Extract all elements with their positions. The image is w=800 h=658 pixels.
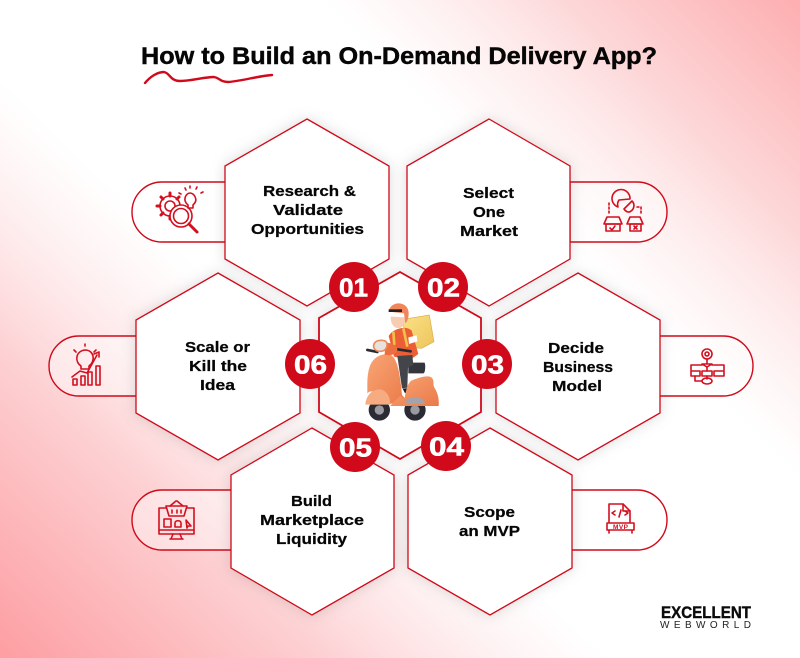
pill <box>570 182 667 242</box>
panel: scale icon pill <box>49 336 137 396</box>
pill <box>571 490 667 550</box>
panel: step 2 <box>407 119 570 306</box>
step number 05: 05 <box>339 432 372 462</box>
step label <box>185 339 250 394</box>
panel: step 4 <box>408 428 572 615</box>
hexagon <box>407 119 570 306</box>
title underline <box>145 72 272 83</box>
step label: One <box>473 204 505 221</box>
step number 06 <box>285 339 335 389</box>
panel: MVP icon pill <box>571 490 667 550</box>
step number 06: 06 <box>294 350 327 380</box>
step number 05 <box>330 422 380 472</box>
step number 04: 04 <box>429 432 465 462</box>
icon: flowchart with gear <box>691 349 724 384</box>
step label: Business <box>543 359 613 376</box>
handlebar <box>367 349 411 352</box>
rider leg <box>397 355 413 388</box>
illustration: delivery rider on scooter <box>365 303 439 421</box>
step label: Scale or <box>185 339 250 356</box>
step label <box>460 185 518 240</box>
step label: Model <box>552 378 602 395</box>
rear body <box>390 376 439 406</box>
step label <box>251 183 364 238</box>
step label: Market <box>460 223 518 240</box>
icon: bulb with rising bars <box>72 344 100 385</box>
title: How to Build an On-Demand Delivery App? <box>141 43 657 70</box>
step number 03 <box>462 339 512 389</box>
wheels <box>369 399 390 421</box>
step number 02: 02 <box>427 272 460 302</box>
panel: business model icon pill <box>659 336 753 396</box>
icon: pie chart and two stores <box>604 190 643 231</box>
logo: Excellent Webworld <box>660 604 751 631</box>
step label: an MVP <box>459 523 520 540</box>
icon: gears, bulb and magnifier <box>157 186 203 232</box>
icon: monitor with basket <box>159 501 194 539</box>
pill <box>132 490 232 550</box>
pill <box>49 336 137 396</box>
hexagon <box>231 428 394 615</box>
step label: Liquidity <box>276 531 348 548</box>
hexagon <box>225 119 389 306</box>
rider torso <box>389 328 418 360</box>
step label: Research & <box>263 183 356 200</box>
panel: step 3 <box>496 273 660 460</box>
panel: step 1 <box>225 119 389 306</box>
step label: Select <box>463 185 514 202</box>
step number 02 <box>418 262 468 312</box>
front fender <box>365 389 390 405</box>
icon: MVP document: MVP <box>613 524 629 531</box>
pill <box>132 182 226 242</box>
scooter front shield <box>367 354 407 404</box>
logo: Excellent Webworld: EXCELLENT <box>661 604 751 622</box>
step number 03: 03 <box>471 350 504 380</box>
pill <box>659 336 753 396</box>
seat <box>408 363 425 373</box>
step label <box>459 504 520 540</box>
step label: Kill the <box>189 358 247 375</box>
step label: Opportunities <box>251 221 364 238</box>
step number 01: 01 <box>339 272 368 302</box>
hexagon <box>136 273 300 460</box>
step label: Idea <box>200 377 236 394</box>
step number 01 <box>329 262 379 312</box>
rider head and helmet <box>391 317 405 328</box>
hexagon <box>408 428 572 615</box>
headlight <box>385 343 397 355</box>
panel: step 5 <box>231 428 394 615</box>
panel: research icon pill <box>132 182 226 242</box>
panel: step 6 <box>136 273 300 460</box>
panel: marketplace icon pill <box>132 490 232 550</box>
step label: Decide <box>548 340 604 357</box>
step label: Build <box>291 493 332 510</box>
step label <box>543 340 613 395</box>
step label <box>260 493 364 548</box>
logo: Excellent Webworld: WEBWORLD <box>660 620 751 631</box>
delivery box <box>403 315 434 348</box>
step label: Marketplace <box>260 512 364 529</box>
panel: market icon pill <box>570 182 667 242</box>
step label: Scope <box>464 504 515 521</box>
step label: Validate <box>273 202 343 219</box>
hexagon <box>496 273 660 460</box>
central hexagon <box>319 272 481 459</box>
step number 04 <box>421 421 471 471</box>
